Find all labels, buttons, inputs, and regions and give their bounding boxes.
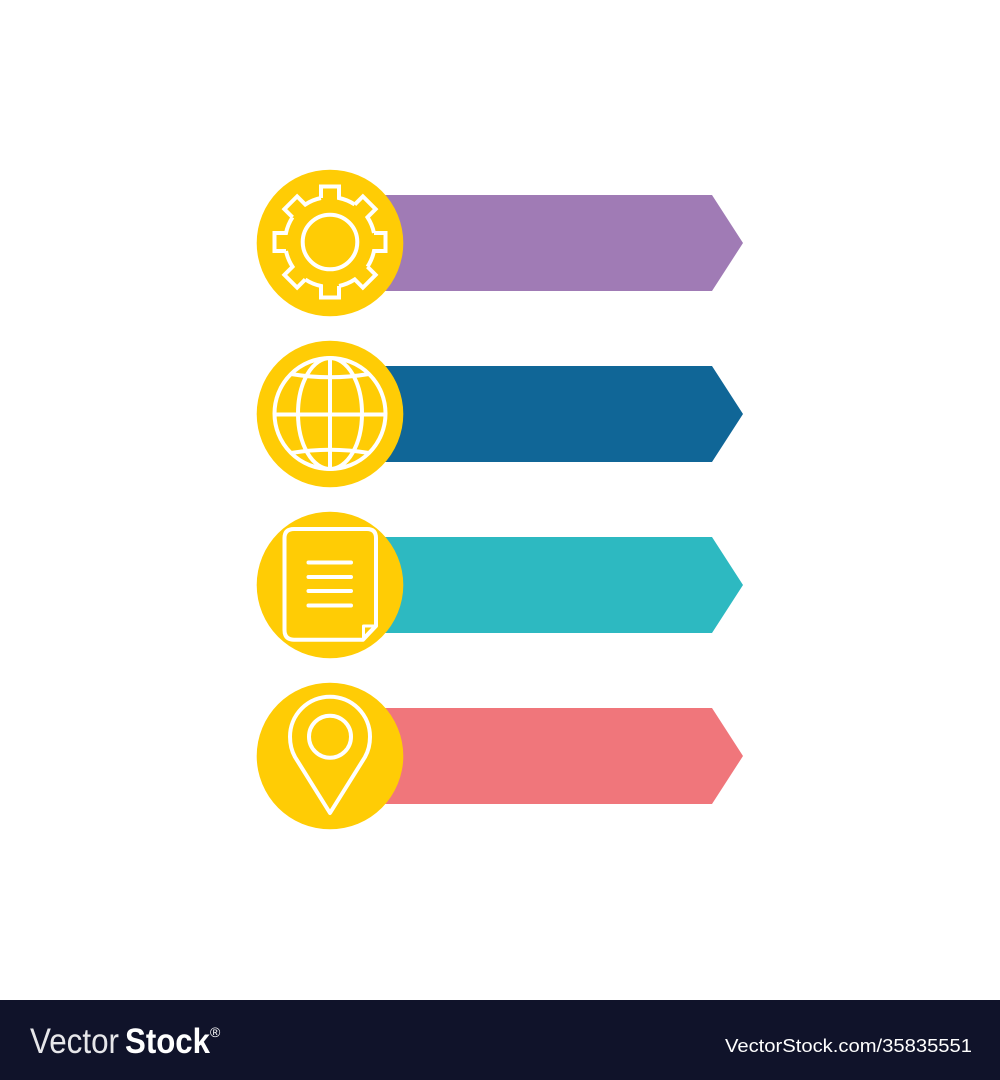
arrow banner: teal	[375, 537, 743, 633]
icon: gear	[273, 185, 387, 299]
yellow circle 2	[257, 341, 403, 487]
arrow banner: purple	[375, 195, 743, 291]
icon: globe	[274, 358, 386, 469]
icon: map pin	[290, 697, 370, 813]
yellow circle 4	[257, 683, 403, 829]
footer logo: VectorStock	[30, 1022, 221, 1061]
footer logo: VectorStock: ®	[210, 1024, 221, 1040]
row 4: location pin	[257, 683, 743, 829]
footer image id: VectorStock.com/35835551	[725, 1036, 972, 1056]
yellow circle 1	[257, 170, 403, 316]
arrow banner: blue	[375, 366, 743, 462]
icon: document	[284, 529, 376, 640]
footer logo: VectorStock: Stock	[125, 1022, 210, 1061]
row 3: document	[257, 512, 743, 658]
yellow circle 3	[257, 512, 403, 658]
row 1: settings	[257, 170, 743, 316]
footer bar	[0, 1000, 1000, 1080]
arrow banner: coral	[375, 708, 743, 804]
row 2: globe	[257, 341, 743, 487]
footer logo: VectorStock: Vector	[30, 1022, 119, 1061]
